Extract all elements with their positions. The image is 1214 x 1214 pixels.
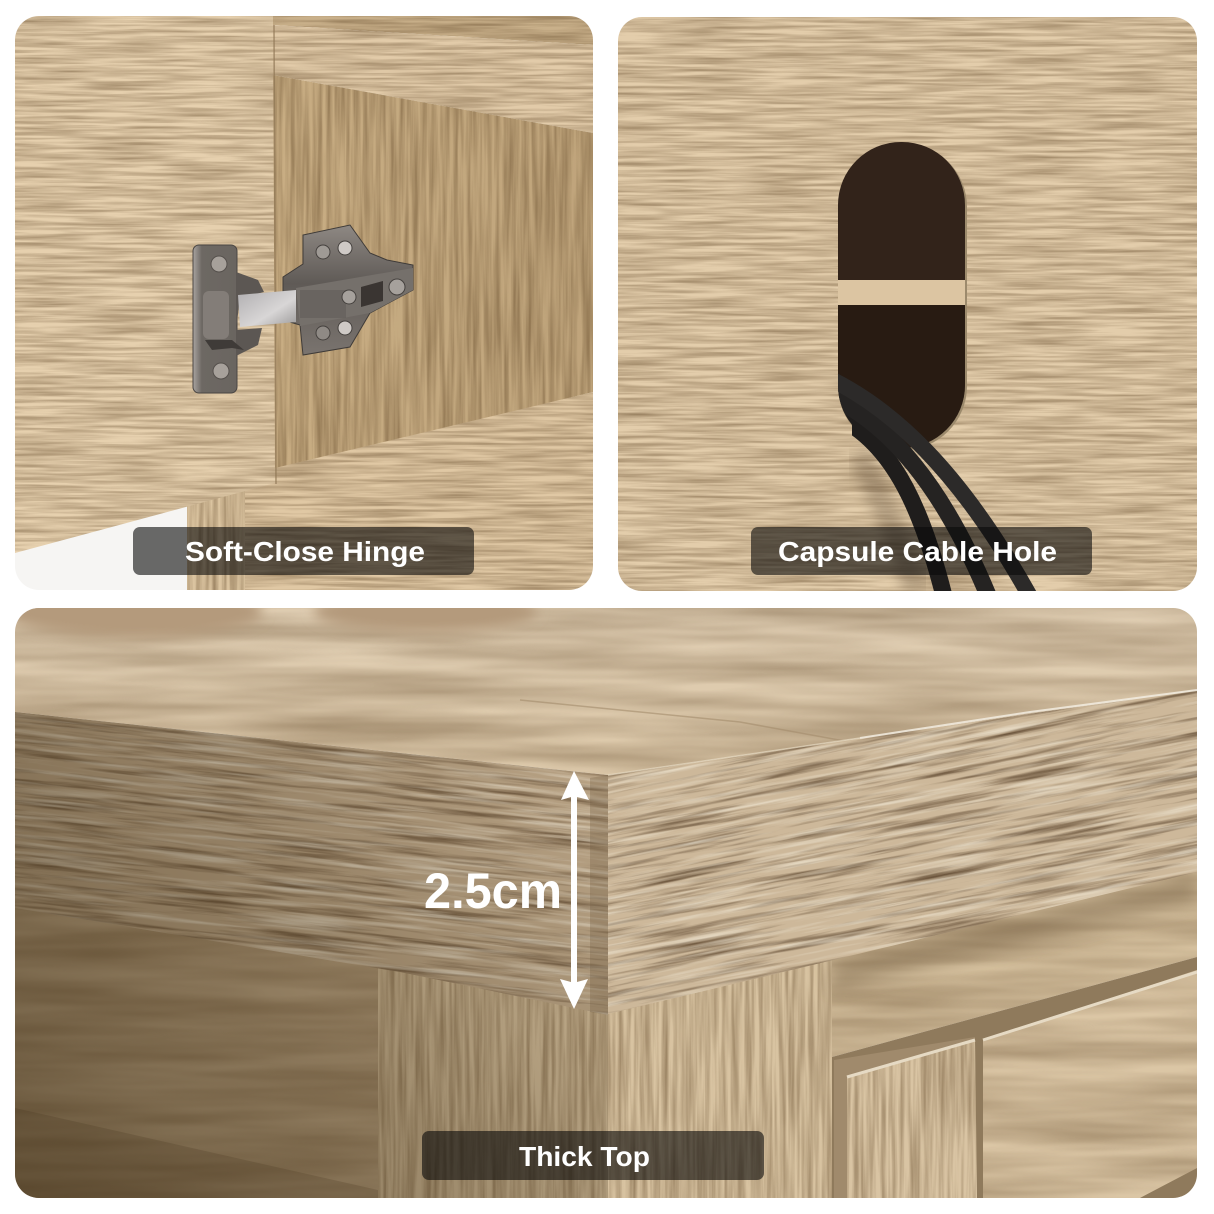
upper shelf edge	[273, 16, 593, 45]
icon: hinge	[193, 225, 413, 393]
blurred bowls	[16, 608, 538, 639]
icon: capsule hole	[838, 142, 967, 450]
door edge shadow	[274, 25, 276, 484]
shading over left side	[15, 712, 608, 1198]
door plate	[193, 245, 237, 393]
seam on table top	[520, 700, 850, 742]
right door	[983, 970, 1197, 1198]
lower shelf	[245, 392, 593, 590]
label: soft-close hinge	[133, 527, 474, 575]
left edge face of top	[15, 712, 608, 1015]
left side rail	[15, 900, 385, 1198]
cable shadow	[860, 452, 915, 590]
hinge arm	[238, 290, 296, 327]
door recess	[832, 957, 1197, 1198]
label: thick top	[422, 1131, 764, 1180]
divider bar	[838, 280, 965, 305]
panel: capsule cable hole	[618, 17, 1197, 600]
hinge body	[283, 225, 413, 355]
label: soft-close hinge: Soft-Close Hinge	[185, 536, 425, 567]
highlight along edge	[860, 690, 1197, 738]
panel: thick top	[0, 575, 1214, 1198]
white floor background	[15, 507, 187, 590]
adjustment slot	[361, 281, 383, 307]
left door	[834, 1037, 977, 1198]
hole interior	[838, 142, 965, 448]
right rail	[832, 868, 1197, 1057]
upper shelf front	[273, 25, 593, 133]
wood surface	[618, 17, 1197, 591]
open door face	[15, 16, 275, 553]
icon: measurement arrow	[560, 771, 589, 1009]
measurement: 2.5cm: 2.5cm	[424, 863, 562, 919]
label: capsule cable hole: Capsule Cable Hole	[778, 536, 1057, 567]
label: capsule cable hole	[751, 527, 1092, 575]
label: thick top: Thick Top	[519, 1141, 650, 1172]
table top surface	[15, 608, 1197, 775]
screws	[316, 245, 330, 259]
panel: soft-close hinge	[15, 16, 593, 590]
left lower darkness	[15, 1108, 378, 1198]
rail shadow under top	[832, 872, 1197, 990]
hole rim	[838, 143, 967, 450]
corner leg right side	[608, 958, 832, 1198]
cabinet interior back wall	[273, 75, 593, 472]
cabinet leg	[187, 480, 245, 590]
icon: cables	[838, 374, 1036, 591]
right edge face of top	[608, 690, 1197, 1014]
corner leg left side	[378, 965, 612, 1198]
